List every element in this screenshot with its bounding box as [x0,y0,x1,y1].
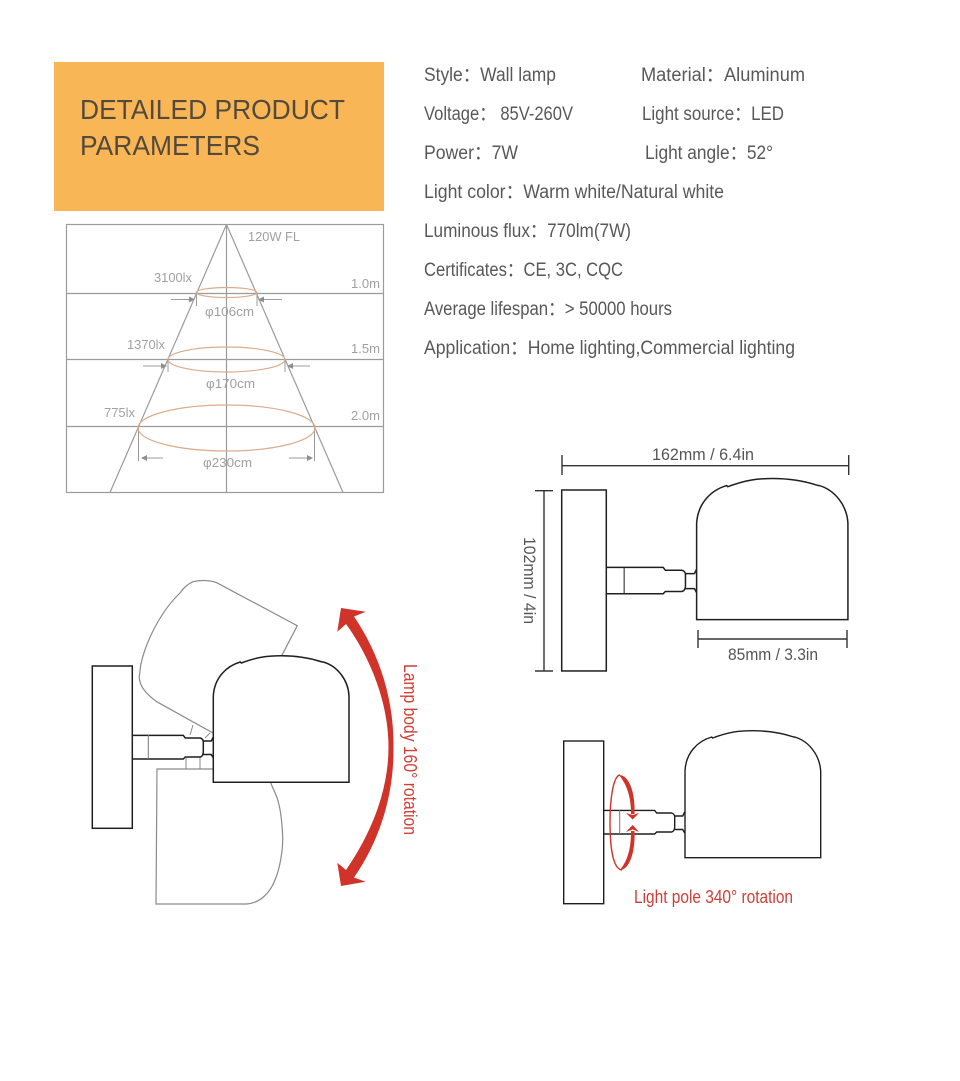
text block: product specifications: Voltage： 85V-260V [424,104,573,125]
chart: light distribution cone: 3100lx [154,270,192,285]
text block: product specifications: Average lifespan：> 50000 hours [424,299,672,320]
chart: light distribution cone: 1.5m [351,341,380,356]
chart: light distribution cone: 1370lx [127,337,165,352]
icon: wall lamp pole view [564,731,821,904]
dimension: plate height: 102mm / 4in [520,537,539,624]
chart: light distribution cone: φ230cm [203,455,252,470]
icon: lamp lowered position outline [156,769,283,904]
panel: title banner [54,62,384,211]
chart: light distribution cone: φ170cm [206,376,255,391]
text block: product specifications: Luminous flux：770lm(7W) [424,221,631,242]
icon: wall lamp dimensions view [562,479,848,671]
arrow: 160 degree rotation [337,608,394,886]
chart: light distribution cone: 2.0m [351,408,380,423]
text block: product specifications: Application：Home lighting,Commercial lighting [424,338,795,359]
icon: lamp raised position outline [139,581,297,733]
dimension: lamp head width: 85mm / 3.3in [728,645,818,664]
text block: product specifications: Light source：LED [642,104,784,125]
icon: rotation arrows around pole [610,775,639,870]
label: lamp body rotation: Lamp body 160° rotation [400,664,420,835]
dimension: overall width: 162mm / 6.4in [652,445,754,464]
chart: light distribution cone: φ106cm [205,304,254,319]
text block: product specifications: Power：7W [424,143,518,164]
panel: light pole rotation diagram [564,731,821,907]
dimension: plate height [520,491,553,671]
icon: wall lamp center position [92,656,349,828]
title: DETAILED PRODUCT [80,94,345,125]
title: PARAMETERS [80,130,260,161]
text block: product specifications: Style：Wall lamp [424,65,556,86]
text block: product specifications: Certificates：CE, 3C, CQC [424,260,623,281]
chart: light distribution cone: 1.0m [351,276,380,291]
title [80,94,345,161]
dimension: lamp head width [698,630,847,664]
chart: light distribution cone: 775lx [104,405,135,420]
icon: hinge details [186,725,210,769]
dimension: overall width [562,445,849,475]
chart: light distribution cone [66,224,384,492]
chart: light distribution cone: 120W FL [248,229,300,244]
text block: product specifications: Light color：Warm white/Natural white [424,182,724,203]
label: light pole rotation: Light pole 340° rotation [634,887,793,907]
text block: product specifications [424,65,805,359]
text block: product specifications: Light angle：52° [645,143,773,164]
panel: lamp body rotation diagram [92,581,420,904]
panel: dimensions diagram [520,445,849,671]
text block: product specifications: Material：Aluminum [641,65,805,86]
